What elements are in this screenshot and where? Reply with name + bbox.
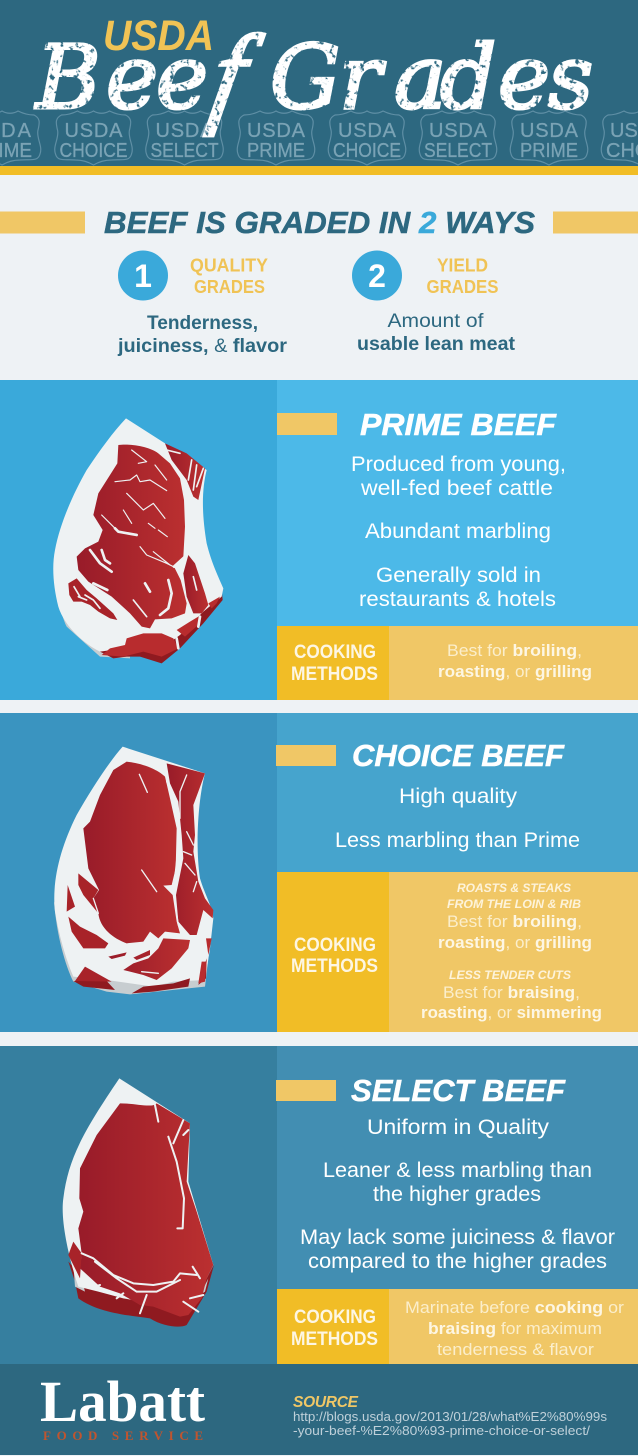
prime cooking methods: Best for broiling,	[447, 642, 582, 660]
prime description	[351, 453, 566, 611]
quality description: juiciness, & flavor	[117, 335, 287, 357]
logo: Labatt Food Service: FOOD SERVICE	[43, 1428, 203, 1443]
select cooking methods: tenderness & flavor	[437, 1341, 595, 1359]
title: Beef Grades	[34, 13, 593, 137]
usda shield pattern: USDA	[338, 120, 397, 142]
quality grades: 1	[134, 258, 152, 294]
title: Beef Grades: Grades	[270, 26, 593, 129]
choice cooking methods: Best for braising,	[443, 984, 580, 1002]
usda shield pattern: CHOICE	[333, 140, 401, 162]
usda shield pattern	[0, 111, 638, 165]
panel: select beef	[0, 1046, 638, 1364]
title: USDA: USDA	[103, 12, 214, 60]
footer	[0, 1364, 638, 1455]
heading: beef is graded: BEEF IS GRADED IN 2 WAYS	[104, 205, 535, 240]
panel: choice beef	[0, 713, 638, 1032]
yield grades: YIELD	[437, 254, 488, 276]
choice description: Less marbling than Prime	[335, 829, 580, 852]
prime description: restaurants & hotels	[359, 588, 556, 611]
yield grades: 2	[368, 258, 386, 294]
choice cooking methods: COOKING	[294, 935, 376, 956]
choice cooking methods: ROASTS & STEAKS	[457, 881, 571, 895]
icon: prime steak	[53, 418, 223, 663]
select description: May lack some juiciness & flavor	[300, 1226, 615, 1249]
yield grades	[352, 250, 498, 300]
select cooking methods: Marinate before cooking or	[405, 1299, 625, 1317]
usda shield pattern: PRIME	[247, 140, 305, 162]
panel: prime beef	[0, 380, 638, 700]
prime cooking methods	[277, 626, 638, 700]
choice cooking methods: LESS TENDER CUTS	[449, 968, 571, 982]
yield description: usable lean meat	[357, 333, 516, 355]
accent bar	[276, 745, 336, 766]
select description: Uniform in Quality	[367, 1116, 550, 1139]
source: -your-beef-%E2%80%93-prime-choice-or-select/	[293, 1423, 590, 1438]
logo: Labatt Food Service: Labatt	[40, 1369, 206, 1434]
heading: choice beef: CHOICE BEEF	[352, 738, 565, 773]
usda shield pattern: PRIME	[520, 140, 578, 162]
usda shield pattern: USDA	[429, 120, 488, 142]
yield grades: GRADES	[426, 276, 498, 297]
select cooking methods	[277, 1289, 638, 1364]
choice description: High quality	[399, 785, 518, 808]
quality description: Tenderness,	[147, 312, 258, 334]
quality grades: QUALITY	[190, 254, 269, 276]
title: Beef Grades: Bee	[34, 26, 208, 129]
prime description: well-fed beef cattle	[360, 477, 553, 500]
quality grades	[118, 250, 269, 300]
source: http://blogs.usda.gov/2013/01/28/what%E2%80%99s	[293, 1409, 608, 1424]
choice cooking methods: roasting, or simmering	[421, 1004, 602, 1022]
usda shield pattern: CHOICE	[60, 140, 128, 162]
heading: select beef: SELECT BEEF	[351, 1073, 566, 1108]
source	[293, 1394, 608, 1438]
accent bar	[276, 1080, 336, 1101]
choice cooking methods	[277, 872, 638, 1032]
header banner	[0, 0, 638, 175]
select cooking methods: COOKING	[294, 1307, 376, 1328]
quality description	[117, 312, 287, 357]
select description: Leaner & less marbling than	[323, 1159, 592, 1182]
select cooking methods: METHODS	[291, 1329, 378, 1350]
choice cooking methods: Best for broiling,	[447, 913, 582, 931]
quality grades: GRADES	[194, 276, 265, 297]
icon: choice steak	[54, 747, 213, 994]
prime cooking methods: METHODS	[291, 664, 378, 685]
prime cooking methods: COOKING	[294, 642, 376, 663]
prime description: Abundant marbling	[365, 520, 551, 543]
choice cooking methods: FROM THE LOIN & RIB	[447, 897, 581, 911]
select cooking methods: braising for maximum	[428, 1320, 602, 1338]
choice cooking methods: METHODS	[291, 956, 378, 977]
select description	[300, 1116, 615, 1273]
accent bar	[277, 413, 337, 435]
usda shield pattern: USDA	[156, 120, 214, 142]
usda shield pattern: US	[610, 120, 638, 142]
choice description	[335, 785, 580, 852]
prime description: Produced from young,	[351, 453, 566, 476]
usda shield pattern: SELECT	[150, 140, 218, 162]
choice cooking methods: roasting, or grilling	[438, 934, 592, 952]
title: Beef Grades: f	[203, 13, 269, 137]
yield description	[357, 310, 516, 355]
yield description: Amount of	[388, 310, 484, 332]
prime description: Generally sold in	[376, 564, 541, 587]
prime cooking methods: roasting, or grilling	[438, 663, 592, 681]
usda shield pattern: USDA	[64, 120, 123, 142]
usda shield pattern: USDA	[520, 120, 579, 142]
source: SOURCE	[293, 1394, 359, 1411]
select description: compared to the higher grades	[308, 1250, 607, 1273]
icon: select steak	[63, 1078, 214, 1327]
usda shield pattern: USDA	[247, 120, 306, 142]
usda shield pattern: SELECT	[424, 140, 492, 162]
select description: the higher grades	[373, 1183, 541, 1206]
heading: prime beef: PRIME BEEF	[360, 407, 557, 442]
heading: beef is graded	[0, 205, 638, 240]
